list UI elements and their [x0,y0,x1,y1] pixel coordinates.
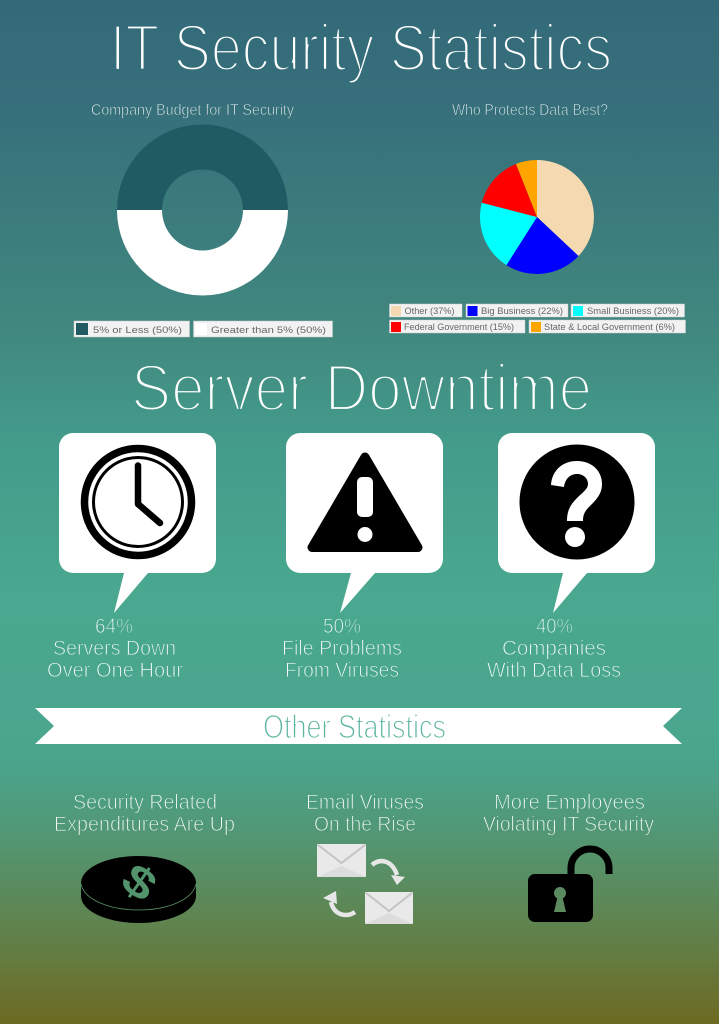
panel: file problems [282,433,443,682]
statistic text: With Data Loss [487,658,621,682]
speech bubble [59,433,216,613]
legend: Other (37%) [404,306,454,317]
heading: server downtime: Server Downtime [131,350,592,424]
statistic text: 64% [95,614,133,638]
caption [483,790,654,836]
panel: data loss [487,433,655,682]
statistic text [487,614,621,682]
caption: Expenditures Are Up [54,812,235,836]
caption [54,790,235,836]
chart title: Company Budget for IT Security [91,102,294,119]
statistic text: Servers Down [53,636,176,660]
legend: Federal Government (15%) [404,322,514,333]
statistic text: Over One Hour [47,658,183,682]
donut chart [117,124,288,295]
statistic text [282,614,402,682]
caption [306,790,424,836]
caption: Email Viruses [306,790,424,814]
icon: open padlock [528,849,609,922]
legend [74,321,332,337]
banner: other statistics [35,708,682,746]
caption: Security Related [73,790,217,814]
icon: question mark [520,444,634,560]
statistic text: From Viruses [285,658,399,682]
statistic text [47,614,183,682]
statistic text: 50% [323,614,361,638]
icon: clock [84,448,192,556]
panel: company budget donut chart [74,102,332,337]
panel: who protects data pie chart [390,102,686,333]
legend: State & Local Government (6%) [544,322,675,333]
chart title: Who Protects Data Best? [452,102,608,119]
icon: envelopes with arrows [317,844,413,924]
legend: Greater than 5% (50%) [211,325,326,336]
pie chart [480,160,594,274]
caption: Violating IT Security [483,812,654,836]
title: IT Security Statistics [110,10,612,84]
caption: On the Rise [314,812,416,836]
icon: dollar coin [81,853,196,923]
icon: warning triangle [312,457,418,548]
statistic text: File Problems [282,636,402,660]
legend: Big Business (22%) [481,306,563,317]
icon: dollar coin: $ [113,853,166,911]
statistic text: Companies [502,636,606,660]
legend: 5% or Less (50%) [93,325,182,336]
statistic text: 40% [536,614,573,638]
panel: servers down [47,433,216,682]
legend [390,304,686,333]
caption: More Employees [494,790,645,814]
banner heading: Other Statistics [263,709,446,746]
panel: employees violating [483,790,654,922]
speech bubble [498,433,655,613]
speech bubble [286,433,443,613]
legend: Small Business (20%) [587,306,679,317]
panel: email viruses [306,790,424,924]
panel: expenditures [54,790,235,923]
